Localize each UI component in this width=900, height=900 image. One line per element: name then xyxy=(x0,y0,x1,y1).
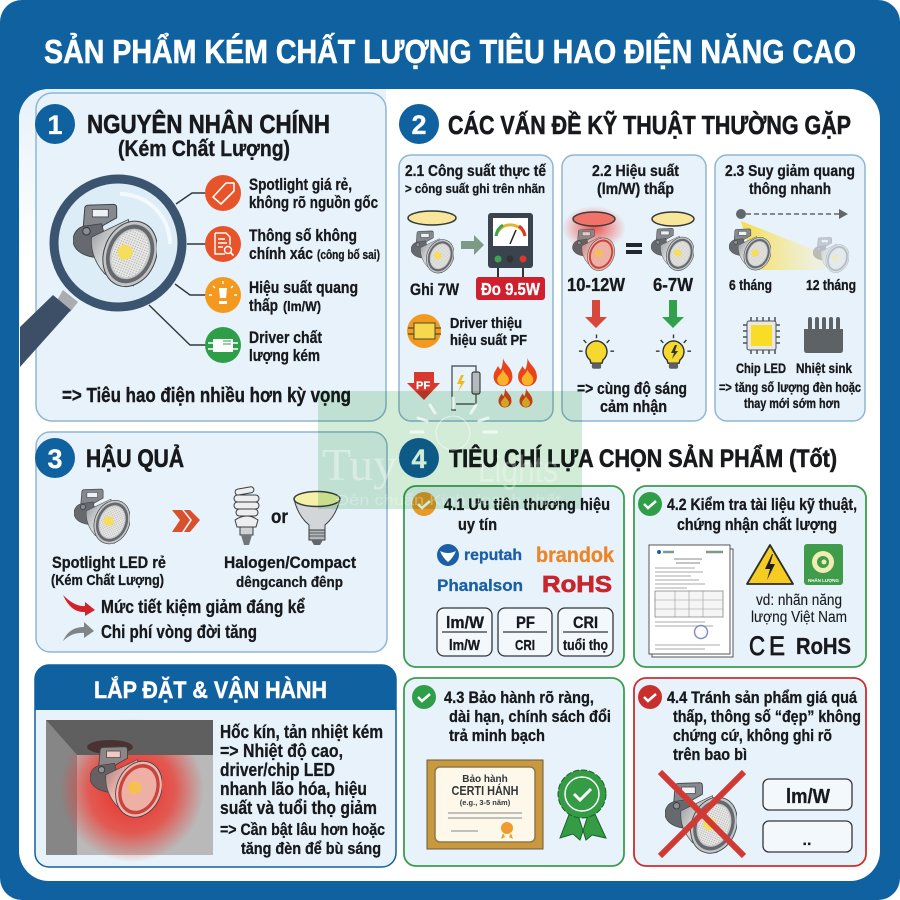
illustration: warranty certificate: (e.g., 3-5 năm) xyxy=(460,798,511,807)
light beam and lamps xyxy=(729,221,853,276)
callout connector lines xyxy=(149,193,206,345)
icon: energy label xyxy=(804,544,843,585)
text: installation notes: => Nhiệt độ cao, xyxy=(220,741,343,761)
text: inaccurate specs xyxy=(249,226,380,263)
brand logos: brandok xyxy=(536,544,614,567)
watermark: Tuyen Lights: Tuy xyxy=(322,439,397,490)
section 4 heading xyxy=(399,438,837,478)
box: empty spec: .. xyxy=(803,832,811,849)
text: poor driver: Driver chất xyxy=(249,328,322,347)
label: halogen compact: dêngcanch đênp xyxy=(236,574,343,591)
icon: document search xyxy=(205,226,241,262)
illustration: warranty certificate: Bảo hành xyxy=(462,774,508,785)
arrow to meter xyxy=(461,235,484,255)
heading 4.4: 4.4 Tránh sản phẩm giá quá xyxy=(667,688,857,707)
text: same perceived brightness: => cùng độ sáng xyxy=(577,379,687,398)
icon: hot lamp xyxy=(562,206,626,275)
heading 4.1: uy tín xyxy=(458,516,497,534)
heading 4.4: chứng cứ, không ghi rõ xyxy=(673,726,832,745)
brand logos: Phanalson xyxy=(437,576,523,595)
text: poor driver: lượng kém xyxy=(249,346,320,365)
spec box: lm/W: lm/W xyxy=(449,638,480,654)
badge 3 xyxy=(35,438,75,478)
wattage labels xyxy=(567,275,693,295)
icon: crossed out lamp xyxy=(660,772,745,860)
illustration: warranty certificate xyxy=(427,760,543,849)
heading 4.3 xyxy=(444,688,611,745)
spec box: CRI xyxy=(558,608,613,656)
icon: LED chip xyxy=(743,317,780,354)
heading 2.3: thông nhanh xyxy=(749,181,831,198)
text: installation notes xyxy=(220,722,385,858)
heading 2.3 xyxy=(725,163,855,198)
icon: power meter xyxy=(488,213,533,277)
labels: chip and sink xyxy=(736,360,852,376)
text: installation notes: suất và tuổi thọ giảm xyxy=(220,798,377,818)
labels: chip and sink: Chip LED xyxy=(736,360,786,376)
text: low PF driver: Driver thiệu xyxy=(450,315,522,332)
icon: power circuit xyxy=(452,366,480,410)
timeline arrow xyxy=(736,209,848,219)
panel 4.3: warranty xyxy=(404,678,624,866)
brand logos: RoHS xyxy=(542,571,612,597)
label: halogen compact xyxy=(224,553,356,591)
heading 2.2: 2.2 Hiệu suất xyxy=(592,163,680,180)
heading 4.1 xyxy=(444,496,610,534)
heading: main causes xyxy=(87,109,330,161)
text: same perceived brightness xyxy=(577,379,687,416)
check green xyxy=(412,685,436,709)
wattage labels: 6-7W xyxy=(653,275,693,295)
spec box: PF: PF xyxy=(516,613,535,632)
spec box: CRI: tuổi thọ xyxy=(563,638,608,654)
heading 3: HẬU QUẢ xyxy=(86,443,184,473)
heading 2.3: 2.3 Suy giảm quang xyxy=(725,163,855,180)
heading 4.2: 4.2 Kiểm tra tài liệu kỹ thuật, xyxy=(667,496,857,514)
text: inaccurate specs: Thông số không xyxy=(249,226,357,245)
check orange xyxy=(412,492,436,516)
icon: lamp with halo xyxy=(408,211,459,277)
heading 4.3: 4.3 Bảo hành rõ ràng, xyxy=(444,688,594,707)
text: cheap spotlight: Spotlight giá rẻ, xyxy=(249,175,352,194)
panel 4.1: reputable brands xyxy=(404,486,624,667)
spec box: CRI: CRI xyxy=(573,613,598,632)
icon: driver orange xyxy=(407,314,441,348)
text: replace sooner xyxy=(719,380,861,411)
text: same perceived brightness: cảm nhận xyxy=(600,397,667,416)
heading: main causes: (Kém Chất Lượng) xyxy=(118,136,290,161)
conclusion text: => Tiêu hao điện nhiều hơn kỳ vọng xyxy=(62,384,351,407)
labels: months: 12 tháng xyxy=(806,278,856,294)
check red xyxy=(638,685,662,709)
panel: installation and operation xyxy=(35,665,396,867)
box: empty spec xyxy=(763,821,852,852)
text: installation notes: tăng đèn để bù sáng xyxy=(241,839,381,858)
spec box: PF xyxy=(498,608,552,656)
text: low luminous efficacy: thấp xyxy=(249,296,278,315)
icon: green rosette xyxy=(558,770,606,840)
text: poor driver xyxy=(249,328,322,365)
text: inaccurate specs: chính xác xyxy=(249,244,313,263)
text: replace sooner: => tăng số lượng đèn hoặc xyxy=(719,380,861,395)
label: cheap LED spotlight xyxy=(51,554,166,589)
section 2 heading: 2 xyxy=(411,110,427,140)
icon: PF down arrow: PF xyxy=(416,380,430,392)
text: low PF driver: hiệu suất PF xyxy=(450,332,527,349)
icon: driver xyxy=(205,327,241,363)
text: low PF driver xyxy=(450,315,527,349)
icon: chevrons xyxy=(172,510,200,532)
labels: months xyxy=(729,278,856,294)
illustration: warranty certificate: CERTI HÁNH xyxy=(452,783,518,798)
text: energy label example: lượng Việt Nam xyxy=(751,609,847,626)
icon: cheap spotlight xyxy=(74,489,137,549)
section 4 heading: 4 xyxy=(411,444,427,474)
text: energy label example xyxy=(751,592,847,626)
text: low luminous efficacy xyxy=(249,278,358,315)
heading 2.2 xyxy=(592,163,680,198)
equals sign xyxy=(626,243,642,254)
icon: price tag xyxy=(205,175,241,211)
heading 2.1: > công suất ghi trên nhãn xyxy=(405,181,545,196)
labels: chip and sink: Nhiệt sink xyxy=(796,360,852,376)
label: halogen compact: Halogen/Compact xyxy=(224,553,356,572)
text: installation notes: nhanh lão hóa, hiệu xyxy=(220,779,367,799)
watermark: Tuyen Lights: Đèn chuẩn Kinh doanh chất xyxy=(336,492,562,509)
marks: CE and RoHS xyxy=(749,631,851,661)
text: energy label example: vd: nhãn năng xyxy=(756,592,842,609)
arrow: red down xyxy=(63,595,95,616)
text: inaccurate specs: (công bố sai) xyxy=(317,248,380,262)
arrow: green down xyxy=(662,300,684,328)
text: cheap spotlight: không rõ nguồn gốc xyxy=(249,193,378,212)
watermark: Tuyen Lights xyxy=(318,391,582,509)
wattage labels: 10-12W xyxy=(567,275,625,295)
spec box: lm/W: lm/W xyxy=(446,613,485,632)
panel 4.4: avoid cheap products xyxy=(634,678,866,866)
icon: energy label: NHÃN LƯỢNG xyxy=(808,577,839,583)
heading: main causes: NGUYÊN NHÂN CHÍNH xyxy=(87,109,330,139)
heading 4.1: 4.1 Ưu tiên thương hiệu xyxy=(444,496,610,514)
text: low luminous efficacy: (lm/W) xyxy=(283,298,321,314)
labels: months: 6 tháng xyxy=(729,278,772,294)
brand logos xyxy=(437,544,614,597)
marks: CE and RoHS: E xyxy=(769,631,785,661)
check green xyxy=(638,492,662,516)
arrow: red down xyxy=(585,300,607,328)
panel 2.3: lumen decay xyxy=(715,155,865,421)
heading 2.1: 2.1 Công suất thực tế xyxy=(405,163,546,180)
marks: CE and RoHS: C xyxy=(749,631,765,661)
box: lm/W: lm/W xyxy=(786,786,830,808)
text: cheap spotlight xyxy=(249,175,378,212)
icon: compact bulb xyxy=(234,486,259,545)
text: low luminous efficacy: Hiệu suất quang xyxy=(249,278,358,297)
icon: flames xyxy=(494,358,537,408)
section 4 heading: TIÊU CHÍ LỰA CHỌN SẢN PHẨM (Tốt) xyxy=(449,443,837,473)
heading 4.3: trả minh bạch xyxy=(449,726,545,745)
panel 2.2: low efficacy xyxy=(562,155,706,421)
brand logos: reputah xyxy=(464,547,522,564)
text: installation notes: => Cần bật lâu hơn hoặc xyxy=(220,820,385,839)
spec box: lm/W xyxy=(437,608,492,656)
heading 4.4: trên bao bì xyxy=(673,745,747,764)
panel 3: consequences xyxy=(35,432,387,652)
label: cheap LED spotlight: Spotlight LED rẻ xyxy=(52,554,166,572)
red measured label: Đo 9.5W xyxy=(481,279,540,299)
header band: LẮP ĐẶT & VẬN HÀNH xyxy=(94,676,327,704)
icon: test report document xyxy=(649,545,733,657)
icon: bulbs xyxy=(579,334,691,369)
text: lifecycle cost rises: Chi phí vòng đời tăng xyxy=(101,622,257,642)
header band xyxy=(35,665,396,710)
arrow: gray up xyxy=(63,622,94,641)
text: replace sooner: thay mới sớm hơn xyxy=(744,396,840,411)
icon: good lamp xyxy=(651,212,699,275)
badge 3: 3 xyxy=(47,444,63,474)
heading 2.1 xyxy=(405,163,546,196)
heading 4.2 xyxy=(667,496,857,534)
illustration: recessed hot lamp xyxy=(46,718,213,862)
spec box: PF: CRI xyxy=(515,638,535,654)
icon: heat sink xyxy=(804,317,843,353)
text: savings drop: Mức tiết kiệm giảm đáng kể xyxy=(101,597,305,617)
heading 4.4: thấp, thông số “đẹp” không xyxy=(673,707,861,726)
badge 1: 1 xyxy=(47,110,63,140)
icon: magnifying glass with spotlight xyxy=(20,179,182,367)
heading 2.2: (lm/W) thấp xyxy=(597,181,674,198)
panel 1: main causes xyxy=(20,93,386,421)
heading 4.4 xyxy=(667,688,861,764)
panel 2.1: real power xyxy=(399,155,553,421)
text: installation notes: driver/chip LED xyxy=(220,760,335,780)
heading 4.2: chứng nhận chất lượng xyxy=(677,516,837,534)
section 2 heading xyxy=(399,104,851,144)
label: rated 7W: Ghi 7W xyxy=(410,280,460,299)
watermark: Tuyen Lights: Lights xyxy=(478,449,558,491)
label: cheap LED spotlight: (Kém Chất Lượng) xyxy=(51,573,164,589)
box: lm/W xyxy=(763,779,852,810)
icon: low efficacy lamp xyxy=(205,277,241,313)
panel 4.2: technical documents xyxy=(634,486,866,667)
icon: PF down arrow xyxy=(407,372,440,400)
icon: halogen PAR lamp xyxy=(294,492,340,545)
text: installation notes: Hốc kín, tản nhiệt kém xyxy=(220,722,383,742)
badge 1 xyxy=(35,104,75,144)
marks: CE and RoHS: RoHS xyxy=(796,633,851,659)
heading 4.3: dài hạn, chính sách đổi xyxy=(449,707,611,726)
text: or: or xyxy=(271,507,289,528)
icon: warning triangle xyxy=(747,545,793,584)
